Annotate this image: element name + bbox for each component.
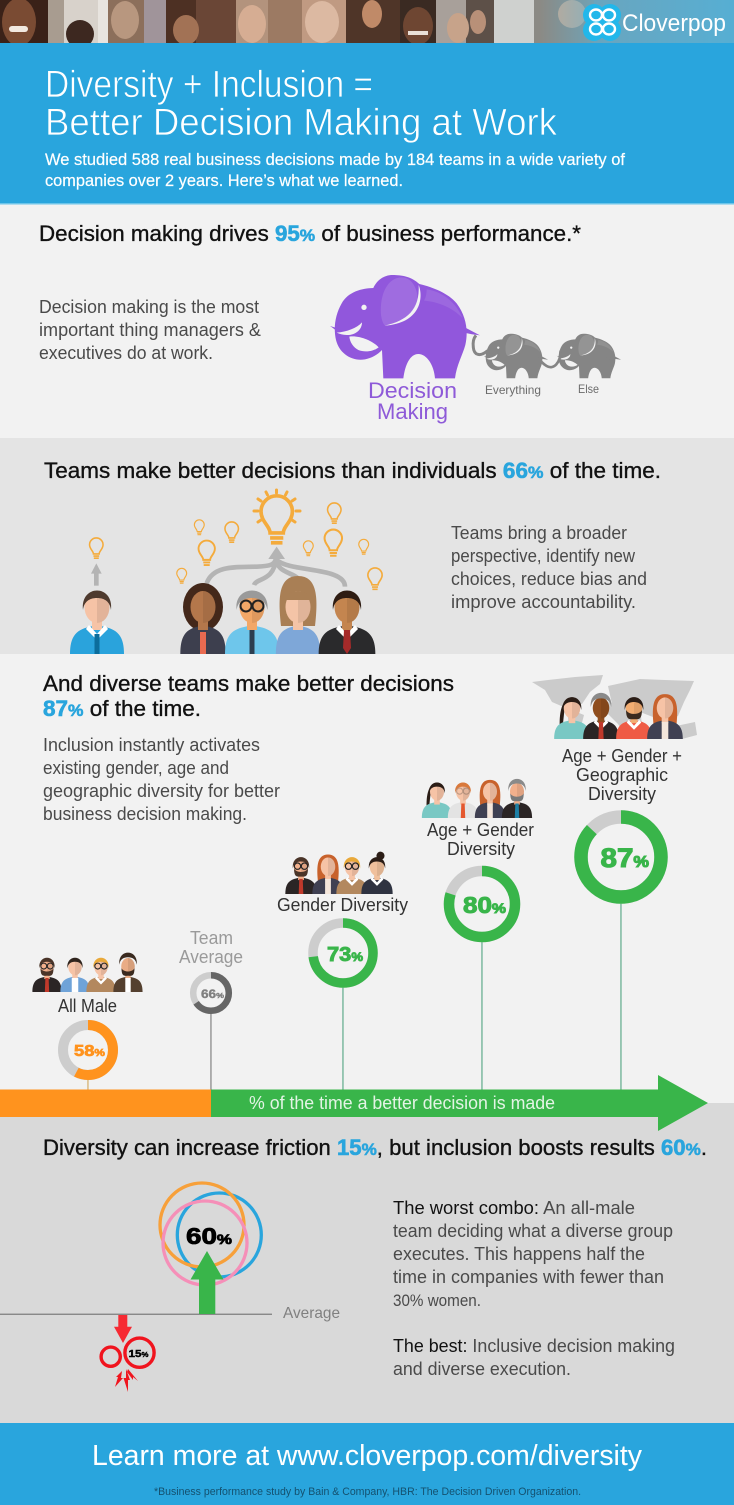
text block: worst combo: executes. This happens half the [393, 1244, 645, 1264]
subtitle: We studied 588 real business decisions made by 184 teams in a wide variety of [45, 150, 625, 169]
donut: 66% [193, 975, 229, 1011]
icon: team converging arrows and bulbs [70, 490, 382, 654]
stem [620, 903, 622, 1090]
icon: overlapping circles with up arrow: 60 % [186, 1223, 233, 1249]
heading: 87% of the time. [43, 696, 201, 721]
icon: friction circles with down arrow [101, 1315, 154, 1392]
timeline bar with arrow [0, 1075, 708, 1131]
text block: worst combo: The worst combo: An all-male [393, 1198, 635, 1218]
person: man four [319, 590, 375, 654]
label: age + gender diversity: Age + Gender [427, 820, 534, 840]
photo strip of faces [0, 0, 734, 48]
label: everything else [485, 382, 599, 397]
icon: elephants [330, 275, 621, 424]
call to action: Learn more at www.cloverpop.com/diversity [92, 1440, 642, 1472]
donut: 87% [581, 817, 661, 897]
label: team average: Team [190, 928, 233, 948]
label: decision making: Making [377, 399, 448, 424]
heading: And diverse teams make better decisions [43, 671, 454, 696]
text block: Teams bring a broader [451, 523, 627, 543]
title [45, 64, 558, 144]
header panel [0, 43, 734, 204]
text block [43, 735, 280, 824]
text block: worst combo [393, 1198, 673, 1310]
donut: 58% [63, 1025, 113, 1075]
text block: the best: The best: Inclusive decision making [393, 1336, 675, 1356]
person: woman one [180, 583, 226, 654]
donut: 80% [449, 871, 515, 937]
stem [210, 1013, 212, 1090]
label: team average [179, 928, 243, 967]
text block: worst combo: team deciding what a diverse group [393, 1221, 673, 1241]
text block: improve accountability. [451, 592, 636, 612]
label: all male: All Male [58, 996, 117, 1016]
label: decision making [368, 378, 457, 424]
subtitle: companies over 2 years. Here’s what we learned. [45, 171, 403, 190]
label: age + gender + geographic diversity [562, 746, 682, 804]
baseline: average: Average [283, 1305, 340, 1322]
text block: geographic diversity for better [43, 781, 280, 801]
heading: Diversity can increase friction 15%, but inclusion boosts results 60%. [43, 1135, 707, 1160]
person: man two [225, 590, 279, 654]
panel: friction and inclusion [0, 1103, 734, 1423]
text block: choices, reduce bias and [451, 569, 647, 589]
panel: diverse teams [32, 671, 697, 1090]
label: everything else: Everything [485, 383, 541, 397]
label: age + gender diversity: Diversity [447, 839, 515, 859]
title: Diversity + Inclusion = [45, 64, 373, 106]
heading [43, 671, 454, 721]
text block: executives do at work. [39, 343, 213, 363]
stem [87, 1078, 89, 1090]
footnote: *Business performance study by Bain & Company, HBR: The Decision Driven Organization. [154, 1486, 581, 1498]
label: decision making: Decision [368, 378, 457, 403]
donut: 66%: 66 % [201, 989, 224, 1001]
label: age + gender + geographic diversity: Diversity [588, 784, 656, 804]
text block [451, 523, 647, 612]
timeline bar with arrow: % of the time a better decision is made [249, 1093, 555, 1113]
heading: Teams make better decisions than individuals 66% of the time. [44, 458, 661, 483]
text block: the best [393, 1336, 675, 1379]
text block: existing gender, age and [43, 758, 229, 778]
stem [342, 987, 344, 1090]
text block: Inclusion instantly activates [43, 735, 260, 755]
subtitle [45, 150, 625, 190]
donut: 58%: 58 % [74, 1043, 105, 1060]
heading: Decision making drives 95% of business performance.* [39, 221, 581, 246]
label: everything else: Else [578, 382, 599, 396]
label: age + gender diversity [427, 820, 534, 859]
donut: 73% [313, 923, 373, 983]
people: all male [32, 953, 143, 992]
people: gender diversity [285, 852, 393, 894]
text block: the best: and diverse execution. [393, 1359, 571, 1379]
donut: 87%: 87% [600, 843, 649, 873]
donut: 80%: 80% [463, 892, 507, 918]
person: woman three [276, 576, 320, 654]
text block: Decision making is the most [39, 297, 259, 317]
person: individual [70, 590, 124, 654]
label: gender diversity: Gender Diversity [277, 895, 408, 915]
text block: perspective, identify new [451, 546, 636, 566]
text block: important thing managers & [39, 320, 261, 340]
panel: teams [0, 438, 734, 654]
logo: Cloverpop: Cloverpop [622, 10, 726, 37]
logo: Cloverpop [583, 4, 726, 41]
people: age + gender + geographic [554, 693, 683, 739]
panel: decision making [39, 221, 621, 424]
text block: business decision making. [43, 804, 247, 824]
text block: worst combo: time in companies with fewer than [393, 1267, 664, 1287]
footer [0, 1423, 734, 1505]
label: age + gender + geographic diversity: Geographic [576, 765, 668, 785]
icon: overlapping circles with up arrow [160, 1183, 261, 1314]
text block [39, 297, 261, 363]
people: age + gender [422, 779, 532, 818]
label: age + gender + geographic diversity: Age + Gender + [562, 746, 682, 766]
icon: world map [532, 675, 697, 739]
title: Better Decision Making at Work [45, 102, 558, 144]
text block: worst combo: 30% women. [393, 1291, 481, 1310]
stem [481, 942, 483, 1090]
label: team average: Average [179, 947, 243, 967]
icon: friction circles with down arrow: 15% [128, 1348, 149, 1360]
donut: 73%: 73% [327, 944, 363, 966]
